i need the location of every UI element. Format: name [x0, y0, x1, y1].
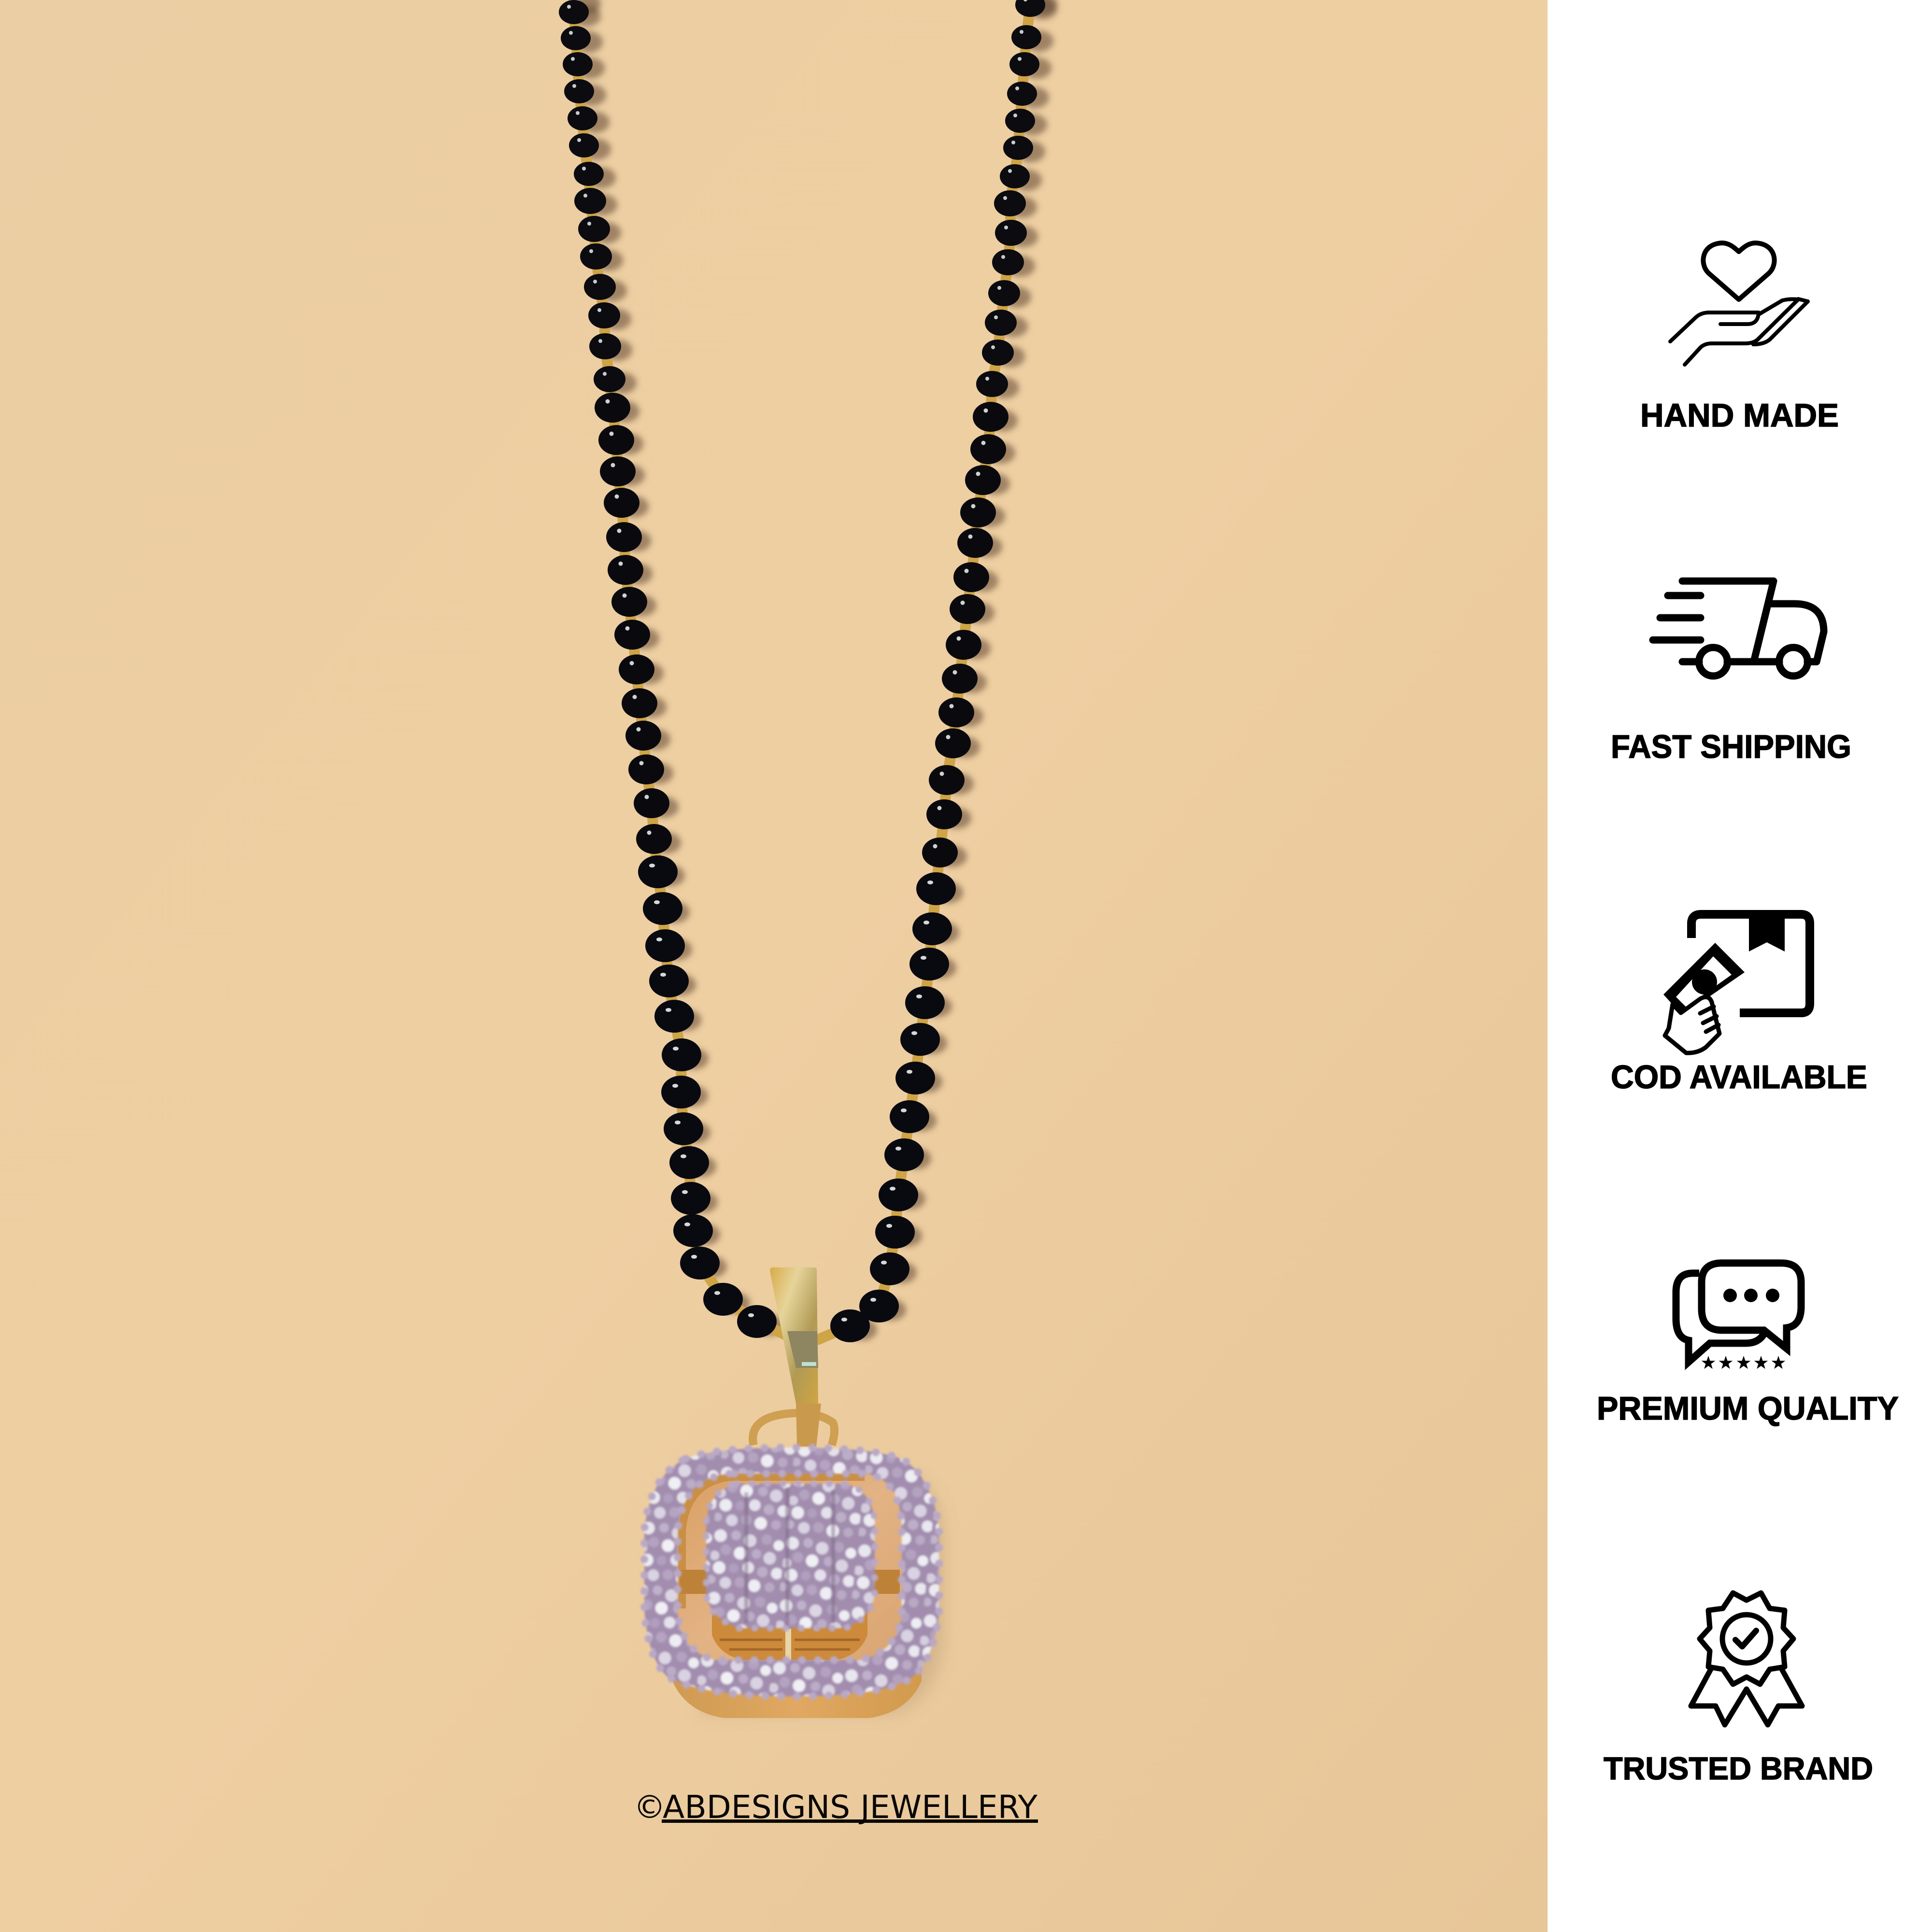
icon: speech bubbles with stars — [1676, 1263, 1801, 1369]
outer stone frame — [644, 1448, 939, 1696]
label: PREMIUM QUALITY — [1597, 1390, 1899, 1427]
right strand shadow — [863, 4, 1043, 1330]
copyright line: ABDESIGNS JEWELLERY — [663, 1789, 1038, 1826]
feature: cod available — [1611, 914, 1867, 1095]
opening interior — [674, 1471, 906, 1663]
left strand beads, middle — [612, 408, 654, 839]
label: TRUSTED BRAND — [1604, 1750, 1873, 1786]
label: FAST SHIPPING — [1611, 728, 1851, 765]
icon: parcel and cash in hand — [1663, 914, 1810, 1053]
white side panel — [1548, 0, 1932, 1932]
copyright line: © — [634, 1789, 666, 1826]
right strand beads, top — [1015, 5, 1030, 176]
feature: trusted brand — [1604, 1593, 1873, 1786]
feature: fast shipping — [1611, 581, 1851, 765]
label: COD AVAILABLE — [1611, 1059, 1867, 1095]
right strand beads, upper — [992, 203, 1011, 384]
necklace: black bead chain — [574, 0, 1043, 1340]
bail — [770, 1267, 821, 1447]
right strand beads, middle — [940, 417, 991, 852]
icon: delivery truck — [1653, 581, 1824, 676]
connector ring — [753, 1413, 835, 1445]
right strand beads, lower — [850, 889, 936, 1326]
left strand beads, lower — [658, 872, 757, 1321]
gold rim — [682, 1477, 865, 1608]
right crossbar — [872, 1570, 900, 1594]
centre stone cushion — [706, 1484, 875, 1628]
icon: award rosette — [1691, 1593, 1802, 1725]
left strand beads, top — [574, 12, 589, 174]
feature: premium quality — [1597, 1263, 1899, 1427]
left crossbar — [680, 1570, 709, 1594]
left strand gold links — [574, 0, 792, 1338]
icon: heart in hand — [1670, 243, 1808, 365]
right strand gold links — [816, 0, 1030, 1340]
feature: hand made — [1640, 243, 1839, 434]
pendant shadow — [700, 1468, 944, 1715]
inner gold step — [712, 1613, 867, 1660]
left strand beads, upper — [590, 201, 610, 379]
label: HAND MADE — [1640, 397, 1839, 434]
left strand shadow — [586, 4, 769, 1325]
pendant — [644, 1267, 944, 1718]
gold base — [670, 1594, 922, 1718]
